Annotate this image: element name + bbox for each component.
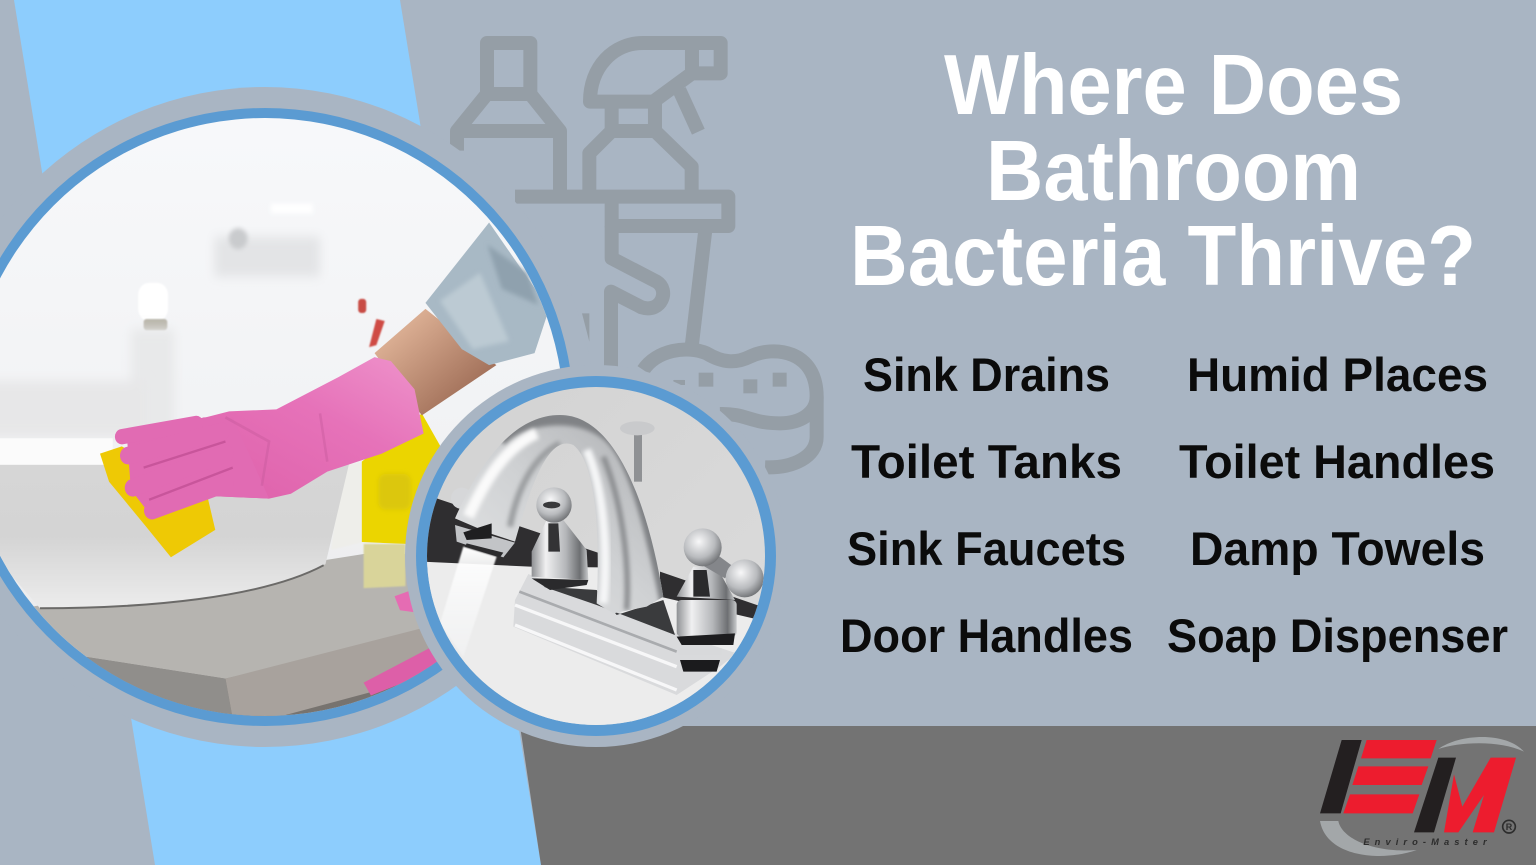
list: bacteria hot spots, left column: Sink Faucets — [847, 522, 1126, 575]
rod — [634, 432, 642, 482]
right handle — [677, 567, 735, 600]
lower hand — [395, 591, 415, 612]
water stream — [440, 546, 498, 628]
spout — [455, 415, 664, 613]
sink surface — [427, 562, 754, 725]
blue ring — [416, 376, 776, 736]
small circular photo: chrome faucet — [400, 365, 787, 747]
title: Where Does — [944, 38, 1403, 133]
logo: Enviro-Master: R — [1506, 822, 1513, 832]
list: bacteria hot spots, right column: Humid Places — [1187, 348, 1488, 401]
counter top — [34, 554, 420, 678]
list: bacteria hot spots, left column — [840, 348, 1133, 662]
list: bacteria hot spots, right column: Soap Dispenser — [1167, 609, 1508, 662]
list: bacteria hot spots, left column: Sink Drains — [863, 348, 1110, 401]
outer ring — [0, 87, 595, 747]
list: bacteria hot spots, right column: Damp Towels — [1190, 522, 1485, 575]
bottle — [340, 462, 362, 506]
dark grey footer band — [520, 726, 1536, 865]
large circular photo: gloved hand cleaning sink — [0, 87, 570, 747]
list: bacteria hot spots, right column: Toilet Handles — [1179, 435, 1495, 488]
base plate — [513, 574, 737, 695]
blue ring — [0, 108, 574, 726]
sink bowl — [0, 464, 349, 608]
photo scene — [427, 387, 765, 725]
left handle — [532, 520, 588, 580]
title: Bathroom — [986, 124, 1361, 219]
photo scene — [0, 118, 560, 716]
backsplash — [423, 498, 600, 567]
light blue slanted band — [14, 0, 541, 865]
arm and sleeve — [375, 309, 496, 415]
back handle stub — [452, 504, 460, 509]
logo: Enviro-Master: Enviro-Master — [1363, 837, 1488, 847]
outer ring — [405, 365, 787, 747]
list: bacteria hot spots, left column: Door Handles — [840, 609, 1133, 662]
title — [850, 38, 1476, 304]
list: bacteria hot spots, right column — [1167, 348, 1508, 662]
nozzle — [455, 525, 515, 557]
title: Bacteria Thrive? — [850, 209, 1476, 304]
logo: Enviro-Master — [1320, 737, 1524, 856]
icon: cleaning supplies watermark — [457, 43, 817, 467]
list: bacteria hot spots, left column: Toilet Tanks — [851, 435, 1122, 488]
rubber glove — [122, 357, 424, 518]
cleaning cloth — [100, 446, 215, 557]
